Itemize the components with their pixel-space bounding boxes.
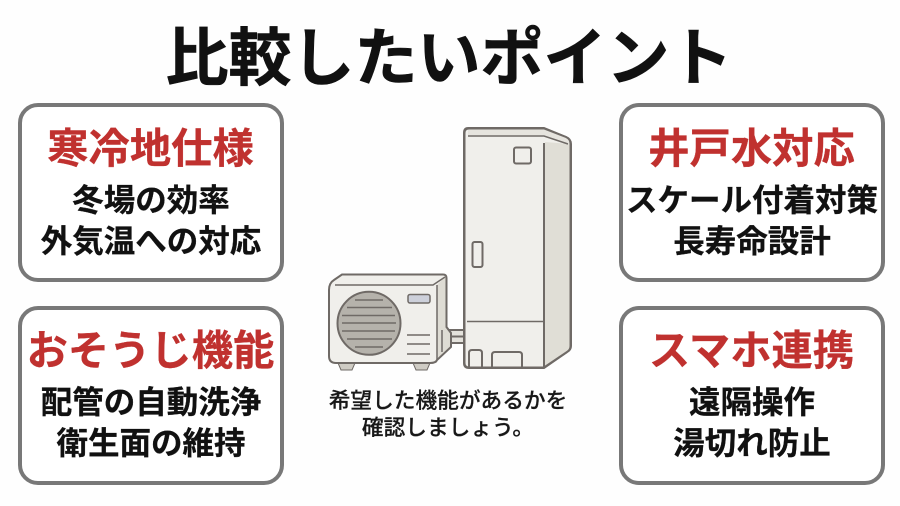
pipes: [448, 330, 465, 343]
text: hygiene: 衛生面の維持: [56, 425, 246, 461]
text: outside temperature: 外気温への対応: [41, 223, 261, 259]
text: long life: 長寿命設計: [673, 223, 831, 259]
heading: well water: 井戸水対応: [648, 126, 855, 172]
caption line 2: 確認しましょう。: [362, 415, 534, 440]
tank: [464, 128, 571, 368]
heading: cleaning: おそうじ機能: [27, 328, 274, 374]
text: winter efficiency: 冬場の効率: [72, 182, 230, 218]
caption: 希望した機能があるかを: [329, 388, 567, 413]
illustration: heat pump water heater: [328, 127, 572, 370]
panel: cold climate: [18, 103, 284, 282]
panel: smartphone: [619, 306, 885, 485]
heading: cold climate: 寒冷地仕様: [47, 126, 254, 172]
title: 比較したいポイント: [166, 24, 732, 94]
text: scale protection: スケール付着対策: [626, 182, 878, 218]
text: pipe cleaning: 配管の自動洗浄: [41, 384, 261, 420]
heading: smartphone: スマホ連携: [649, 328, 854, 374]
panel: cleaning: [18, 306, 284, 485]
text: prevent hot water running out: 湯切れ防止: [673, 425, 831, 461]
text: remote control: 遠隔操作: [689, 384, 815, 420]
panel: well water: [619, 103, 885, 282]
outdoor unit: [329, 274, 451, 370]
